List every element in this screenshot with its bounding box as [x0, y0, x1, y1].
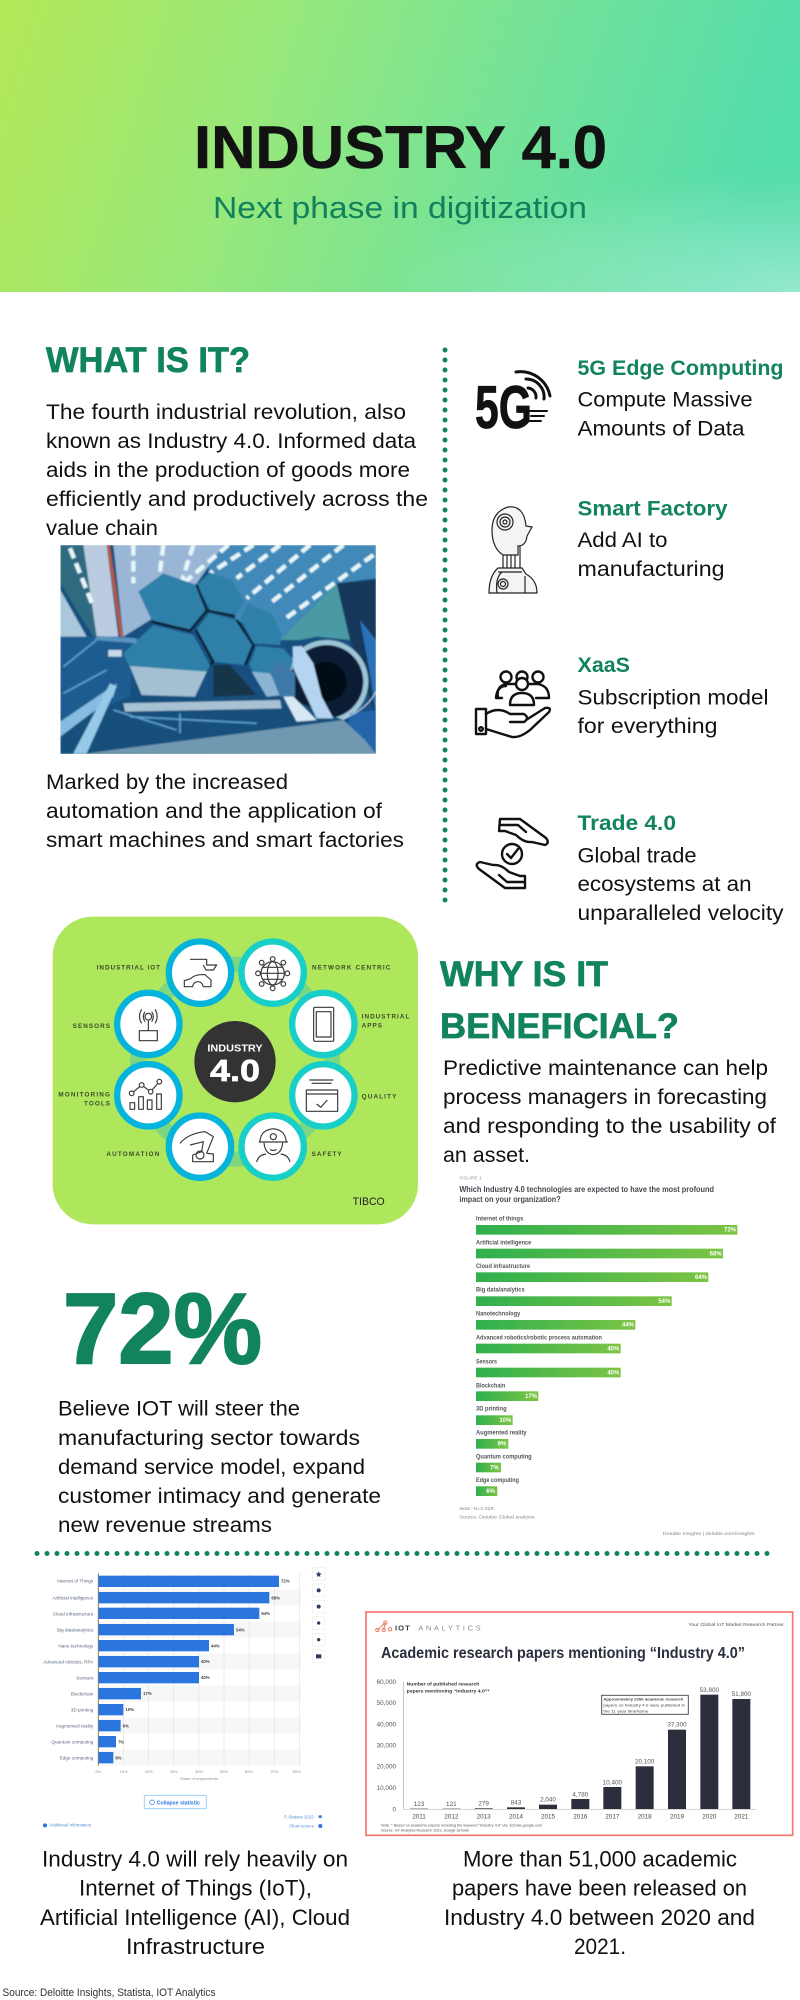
bar chart: Deloitte technologies: 40%	[607, 1346, 620, 1352]
logo: IoT Analytics	[376, 1621, 481, 1633]
photo: hexagonal mirror segments	[60, 545, 376, 754]
text block: IOT belief: manufacturing sector towards	[58, 1426, 360, 1450]
icon: people on open hand	[476, 672, 550, 737]
text block: predictive maintenance: process managers in forecasting	[443, 1085, 767, 1109]
bar chart: Deloitte technologies: Nanotechnology	[476, 1311, 521, 1318]
text block: definition: aids in the production of goods more	[46, 458, 410, 482]
bar chart: Statista share of respondents: 72%	[281, 1579, 290, 1584]
bar chart: Deloitte technologies: 40%	[607, 1370, 620, 1376]
bar chart: IoT Analytics academic papers: 51,800	[732, 1691, 751, 1698]
bar chart: IoT Analytics academic papers: 2018	[638, 1814, 652, 1821]
bar chart: IoT Analytics academic papers: 123	[414, 1801, 425, 1808]
node labels: INDUSTRIAL IOT	[97, 964, 160, 971]
bar chart: Statista share of respondents: 50%	[220, 1769, 228, 1774]
bar chart: Statista share of respondents: 9%	[123, 1723, 129, 1728]
text block: academic papers: papers have been released on	[452, 1876, 747, 1900]
bar chart: Statista share of respondents: 54%	[236, 1627, 245, 1632]
bar chart: Statista share of respondents: Internet of Things	[57, 1579, 94, 1584]
annotation box: papers on Industry 4.0 were published in	[603, 1702, 685, 1707]
heading: why is it beneficial: BENEFICIAL?	[440, 1007, 679, 1046]
node labels: TOOLS	[84, 1100, 110, 1107]
bar chart: Statista share of respondents: 64%	[261, 1611, 270, 1616]
bar chart: Deloitte technologies: 64%	[695, 1275, 708, 1281]
bar chart: IoT Analytics academic papers: 4,780	[572, 1791, 589, 1798]
item: trade 4.0: unparalleled velocity	[578, 901, 784, 925]
text block: predictive maintenance: an asset.	[443, 1143, 530, 1167]
annotation box	[602, 1695, 688, 1714]
bar chart: IoT Analytics academic papers: 10,400	[603, 1779, 622, 1786]
bar chart: Statista share of respondents	[43, 1568, 325, 1829]
node labels: SAFETY	[312, 1151, 342, 1158]
text block: definition: value chain	[46, 516, 158, 540]
item: trade 4.0: ecosystems at an	[578, 872, 752, 896]
bar chart: IoT Analytics academic papers: 53,800	[700, 1687, 719, 1694]
bar chart: Deloitte technologies: Blockchain	[476, 1382, 505, 1389]
centre badge	[194, 1021, 276, 1102]
bar chart: Deloitte technologies: 7%	[490, 1465, 499, 1471]
bar chart: IoT Analytics academic papers: 2011	[412, 1814, 426, 1821]
bar chart: Statista share of respondents: 20%	[145, 1769, 153, 1774]
heading: what is it: WHAT IS IT?	[46, 341, 250, 380]
item: smart factory: manufacturing	[578, 557, 724, 581]
bar chart: Statista share of respondents: 44%	[211, 1643, 220, 1648]
bar chart: Deloitte technologies: FIGURE 1	[459, 1175, 482, 1180]
bar chart: IoT Analytics academic papers: papers mentioning “Industry 4.0”*	[407, 1689, 490, 1694]
text block: definition: known as Industry 4.0. Informed data	[46, 429, 416, 453]
panel: what is it	[46, 341, 428, 852]
bar chart: Statista share of respondents: 6%	[115, 1755, 122, 1760]
text block: IOT belief: customer intimacy and generate	[58, 1484, 381, 1508]
hexagon mirrors	[123, 572, 293, 697]
bar chart: IoT Analytics academic papers: 20,000	[377, 1764, 396, 1771]
bar chart: Deloitte technologies: Advanced robotics/robotic process automation	[476, 1334, 602, 1341]
heading: smart factory: Smart Factory	[578, 498, 728, 520]
bar chart: Deloitte technologies: impact on your organization?	[459, 1194, 561, 1204]
bar chart: Statista share of respondents: 40%	[201, 1659, 210, 1664]
bar chart: Statista share of respondents: 40%	[201, 1675, 210, 1680]
bar chart: IoT Analytics academic papers: 60,000	[377, 1679, 396, 1686]
bar chart: IoT Analytics academic papers: 843	[511, 1799, 522, 1806]
bar chart: IoT Analytics academic papers: 2017	[605, 1814, 620, 1821]
text block: reliance on IoT	[40, 1846, 350, 1959]
bar chart: IoT Analytics academic papers: 50,000	[377, 1700, 396, 1707]
bar chart: Deloitte technologies: Edge computing	[476, 1477, 519, 1484]
node labels	[58, 964, 409, 1158]
bar chart: IoT Analytics academic papers: 2021	[734, 1814, 749, 1821]
bar chart: Deloitte technologies: Note: N=2,029.	[459, 1506, 495, 1511]
bar chart: Deloitte technologies: Big data/analytics	[476, 1287, 525, 1294]
bar chart: Statista share of respondents: Quantum computing	[51, 1739, 94, 1744]
text block: predictive maintenance	[443, 1056, 776, 1167]
icon: robot	[489, 507, 537, 593]
bar chart: Statista share of respondents: 30%	[170, 1769, 178, 1774]
bar chart: IoT Analytics academic papers: 40,000	[377, 1721, 396, 1728]
bar chart: Deloitte technologies: Which Industry 4.0 technologies are expected to have the most profound	[459, 1184, 714, 1194]
item: 5G edge computing: Amounts of Data	[578, 416, 745, 440]
bar chart: Deloitte technologies	[459, 1175, 755, 1536]
bar chart: Deloitte technologies: 17%	[525, 1394, 538, 1400]
annotation box: Approximately 230k academic research	[603, 1696, 684, 1701]
heading: XaaS: XaaS	[578, 654, 630, 677]
bar chart: Deloitte technologies: 10%	[499, 1418, 512, 1424]
bar chart: IoT Analytics academic papers: 2013	[477, 1814, 491, 1821]
engineers in clean suits	[293, 646, 333, 718]
node labels: SENSORS	[73, 1023, 110, 1030]
bar chart: Deloitte technologies: Source: Deloitte Global analysis.	[459, 1514, 536, 1519]
source line: Source: Deloitte Insights, Statista, IOT Analytics	[2, 1987, 216, 1999]
bar chart: Statista share of respondents: Advanced robotics, RPA	[43, 1659, 94, 1664]
bar chart: IoT Analytics academic papers: 121	[446, 1801, 457, 1808]
text block: IOT belief: demand service model, expand	[58, 1455, 365, 1479]
logo: IoT Analytics: IOT	[395, 1624, 411, 1633]
bar chart: Statista share of respondents: Sensors	[76, 1675, 94, 1680]
bar chart: Statista share of respondents: 10%	[120, 1769, 128, 1774]
text block: IOT belief: new revenue streams	[58, 1513, 272, 1537]
title: INDUSTRY 4.0	[194, 114, 607, 181]
bar chart: Deloitte technologies: 9%	[498, 1442, 507, 1448]
bar chart: Statista share of respondents: 7%	[118, 1739, 124, 1744]
bar chart: Statista share of respondents: Nano technology	[58, 1643, 94, 1648]
heading: 5G edge computing: 5G Edge Computing	[578, 357, 784, 380]
bar chart: Deloitte technologies: Augmented reality	[476, 1430, 527, 1437]
node labels: NETWORK CENTRIC	[312, 964, 391, 971]
bar chart: Statista share of respondents: Additional Information	[49, 1823, 92, 1828]
bar chart: Deloitte technologies: Quantum computing	[476, 1453, 532, 1460]
bar chart: Statista share of respondents: Cloud infrastructure	[53, 1611, 94, 1616]
icon: hands with check	[477, 819, 548, 888]
header banner	[0, 0, 800, 292]
centre badge: INDUSTRY	[207, 1044, 263, 1055]
text block: IOT belief: Believe IOT will steer the	[58, 1396, 300, 1420]
text block: predictive maintenance: Predictive maintenance can help	[443, 1056, 768, 1080]
text block: academic papers: 2021.	[574, 1934, 626, 1959]
bar chart: IoT Analytics academic papers: 2014	[509, 1814, 524, 1821]
text block: reliance on IoT: Industry 4.0 will rely heavily on	[42, 1846, 348, 1872]
bar chart: Statista share of respondents: 70%	[270, 1769, 279, 1774]
item: 5G edge computing	[475, 357, 784, 441]
node labels: AUTOMATION	[106, 1151, 160, 1158]
bar chart: IoT Analytics academic papers	[366, 1612, 793, 1835]
heading: trade 4.0: Trade 4.0	[578, 812, 676, 835]
text block: predictive maintenance: and responding to the usability of	[443, 1114, 776, 1138]
text block: academic papers: More than 51,000 academic	[463, 1846, 737, 1872]
logo: IoT Analytics: ANALYTICS	[418, 1624, 481, 1633]
panel: technologies list	[475, 357, 784, 925]
bar chart: Statista share of respondents: © Statista 2022	[284, 1815, 314, 1820]
node circles	[117, 941, 354, 1178]
bar chart: Statista share of respondents: 40%	[195, 1769, 203, 1774]
annotation box: the 11 year timeframe	[603, 1708, 649, 1713]
text block: definition: The fourth industrial revolution, also	[46, 400, 406, 424]
text block: definition	[46, 400, 428, 540]
bar chart: IoT Analytics academic papers: 20,100	[635, 1759, 655, 1766]
bar chart: Statista share of respondents: 60%	[245, 1769, 253, 1774]
text block: marked by: Marked by the increased	[46, 770, 288, 794]
bar chart: IoT Analytics academic papers: 279	[478, 1801, 489, 1808]
support frame	[123, 700, 282, 712]
bar chart: Deloitte technologies: Sensors	[476, 1358, 497, 1365]
node icons	[129, 957, 338, 1162]
bar chart: IoT Analytics academic papers: 2015	[541, 1814, 556, 1821]
item: XaaS: Subscription model	[578, 686, 768, 710]
heading: why is it beneficial: WHY IS IT	[440, 955, 608, 994]
bar chart: Deloitte technologies: 72%	[724, 1228, 737, 1234]
bar chart: IoT Analytics academic papers: Your Global IoT Market Research Partner	[688, 1622, 784, 1627]
bar chart: Deloitte technologies: Cloud infrastructure	[476, 1263, 530, 1270]
bar chart: IoT Analytics academic papers: 2019	[670, 1814, 685, 1821]
bar chart: IoT Analytics academic papers: 0	[392, 1806, 396, 1813]
bar chart: IoT Analytics academic papers: 2,040	[540, 1797, 556, 1804]
bar chart: Statista share of respondents: Augmented reality	[56, 1723, 94, 1728]
bar chart: Deloitte technologies: Artificial intelligence	[476, 1239, 532, 1246]
panel: why is it beneficial	[440, 955, 776, 1167]
collapse button	[144, 1795, 206, 1809]
centre badge: 4.0	[210, 1054, 260, 1088]
bar chart: IoT Analytics academic papers: Note: * Based on academic papers including the keyword "Industry 4.0" via: scholar.google.com	[381, 1823, 543, 1827]
bar chart: Statista share of respondents: 0%	[95, 1769, 102, 1774]
bar chart: Deloitte technologies: 6%	[486, 1489, 496, 1495]
text block: reliance on IoT: Infrastructure	[126, 1934, 265, 1959]
text block: academic papers: Industry 4.0 between 2020 and	[444, 1905, 755, 1930]
bar chart: Statista share of respondents: Show source	[289, 1824, 315, 1829]
item: smart factory: Add AI to	[578, 528, 668, 552]
bar chart: IoT Analytics academic papers: Source: IoT Analytics Research 2022, Google Scholar	[381, 1828, 470, 1832]
credit: TIBCO	[353, 1196, 385, 1208]
bar chart: Deloitte technologies: Deloitte Insights | deloitte.com/insights	[663, 1531, 755, 1536]
bar chart: Statista share of respondents: 3D printing	[71, 1707, 94, 1712]
node labels: MONITORING	[58, 1092, 110, 1099]
node labels: INDUSTRIAL	[362, 1014, 409, 1021]
text block: definition: efficiently and productively across the	[46, 487, 428, 511]
bar chart: IoT Analytics academic papers: Number of published research	[407, 1682, 479, 1687]
bar chart: Statista share of respondents: Artificial intelligence	[52, 1595, 94, 1600]
bar chart: Deloitte technologies: 44%	[622, 1323, 635, 1329]
text block: marked by	[46, 770, 404, 852]
text block: marked by: smart machines and smart factories	[46, 828, 404, 852]
collapse button: Collapse statistic	[157, 1800, 200, 1806]
bar chart: IoT Analytics academic papers: 37,300	[667, 1722, 687, 1729]
bar chart: IoT Analytics academic papers: 2020	[702, 1814, 717, 1821]
text block: reliance on IoT: Internet of Things (IoT),	[79, 1876, 312, 1900]
bar chart: Statista share of respondents: 68%	[271, 1595, 280, 1600]
item: smart factory	[489, 498, 728, 593]
item: 5G edge computing: Compute Massive	[578, 388, 752, 412]
item: XaaS: for everything	[578, 714, 718, 738]
item: trade 4.0: Global trade	[578, 844, 696, 868]
bar chart: Statista share of respondents: 17%	[143, 1691, 152, 1696]
bar chart: Statista share of respondents: Share of respondents	[180, 1776, 218, 1781]
bar chart: IoT Analytics academic papers: 30,000	[377, 1743, 396, 1750]
bar chart: IoT Analytics academic papers: Academic research papers mentioning “Industry 4.0”	[381, 1645, 745, 1662]
bar chart: Statista share of respondents: Blockchain	[71, 1691, 94, 1696]
bar chart: Statista share of respondents: Edge computing	[60, 1755, 94, 1760]
big stat: 72 percent: 72%	[63, 1273, 262, 1385]
bar chart: Statista share of respondents: 80%	[293, 1769, 301, 1774]
bar chart: Deloitte technologies: 68%	[710, 1251, 722, 1257]
bar chart: Deloitte technologies: 54%	[658, 1299, 671, 1305]
item: trade 4.0	[477, 812, 784, 925]
text block: IOT belief	[58, 1396, 381, 1537]
node labels: QUALITY	[362, 1093, 397, 1100]
toolbar buttons	[312, 1568, 325, 1663]
bar chart: Deloitte technologies: 3D printing	[476, 1406, 507, 1413]
icon: 5G signal: 5G	[475, 374, 532, 441]
bar chart: IoT Analytics academic papers: 2016	[573, 1814, 588, 1821]
heading: why is it beneficial	[440, 955, 679, 1046]
node labels: APPS	[362, 1022, 382, 1029]
bar chart: Deloitte technologies: Internet of things	[476, 1216, 524, 1223]
bar chart: IoT Analytics academic papers: 2012	[444, 1814, 459, 1821]
bar chart: IoT Analytics academic papers: 10,000	[377, 1785, 396, 1792]
bar chart: Statista share of respondents: Big data/analytics	[57, 1627, 94, 1632]
bar chart: Statista share of respondents: 10%	[125, 1707, 134, 1712]
text block: marked by: automation and the application of	[46, 799, 382, 823]
text block: reliance on IoT: Artificial Intelligence (AI), Cloud	[40, 1905, 350, 1930]
subtitle: Next phase in digitization	[213, 190, 587, 225]
item: XaaS	[476, 654, 768, 738]
text block: academic papers	[444, 1846, 755, 1959]
panel: industry 4.0 diagram	[53, 917, 418, 1224]
